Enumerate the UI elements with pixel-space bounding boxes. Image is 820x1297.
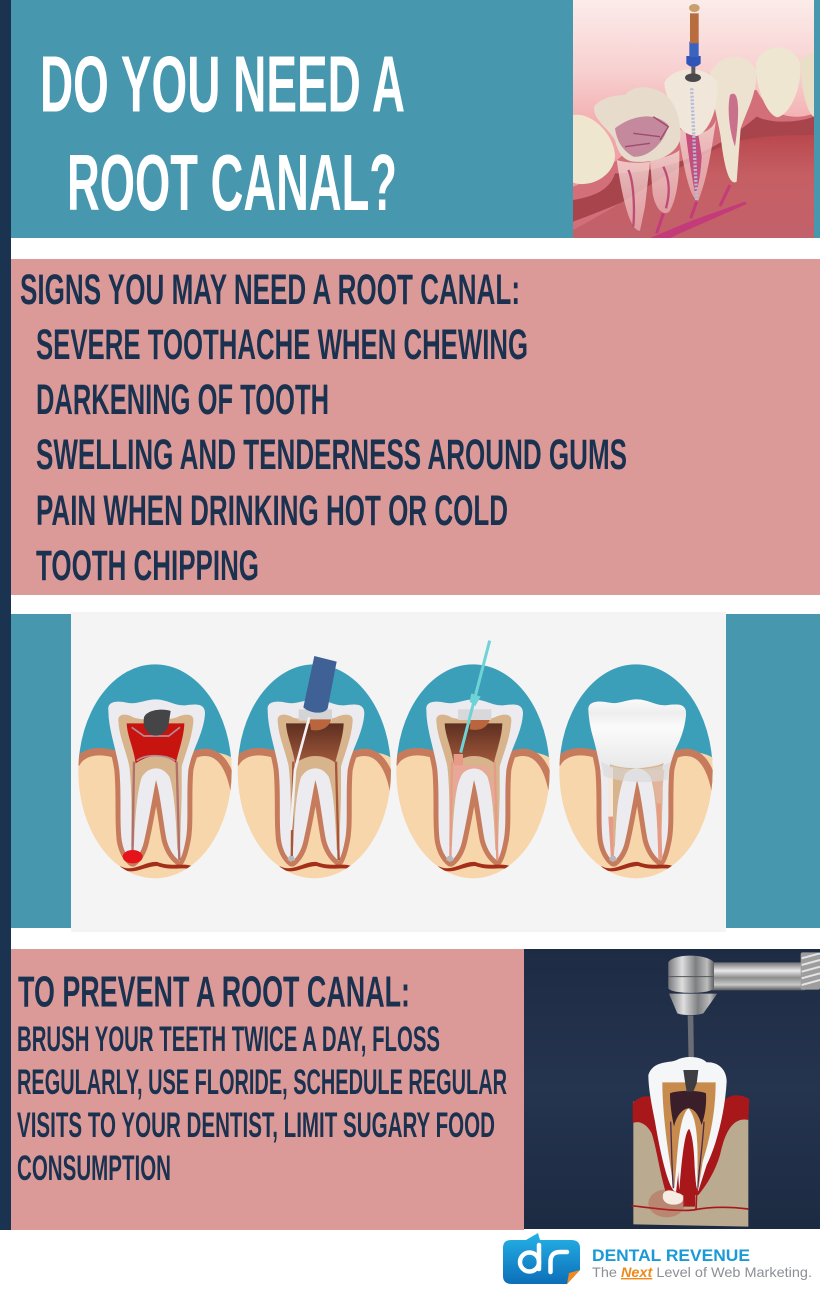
endodontic file (692, 88, 697, 200)
prevention text: BRUSH YOUR TEETH TWICE A DAY, FLOSS (17, 1020, 440, 1059)
left navy stripe (0, 0, 11, 1230)
title: ROOT CANAL? (67, 138, 397, 227)
signs list: PAIN WHEN DRINKING HOT OR COLD (36, 487, 508, 535)
pulp arch (678, 1108, 698, 1190)
signs list (36, 321, 627, 590)
tooth step 4: restored crown (551, 660, 721, 883)
bone block (633, 1100, 748, 1227)
panel: treatment steps (11, 612, 820, 932)
incisors (756, 48, 800, 117)
signs list: DARKENING OF TOOTH (36, 376, 329, 424)
molar crown (594, 87, 680, 162)
illustration: dental drill over infected tooth (524, 949, 820, 1229)
prevention heading: TO PREVENT A ROOT CANAL: (18, 968, 410, 1016)
prevention text: VISITS TO YOUR DENTIST, LIMIT SUGARY FOOD (17, 1106, 495, 1145)
prevention text (17, 1020, 507, 1188)
signs list: TOOTH CHIPPING (36, 542, 259, 590)
panel: signs (11, 259, 820, 595)
illustration: root canal file in molar (573, 0, 814, 238)
title: DO YOU NEED A (40, 40, 405, 128)
header panel (11, 0, 820, 238)
premolar front root (677, 120, 716, 201)
logo icon (503, 1233, 580, 1284)
panel: prevention (11, 949, 524, 1230)
molar roots (617, 160, 650, 231)
prevention text: CONSUMPTION (17, 1149, 171, 1188)
logo: Dental Revenue (503, 1233, 812, 1284)
enamel (648, 1057, 727, 1192)
tooth step 1: infected pulp (70, 660, 240, 883)
title (40, 40, 405, 227)
tooth step 3: filling canal (388, 641, 558, 883)
decay (670, 1091, 706, 1127)
premolar crown (664, 69, 718, 136)
nerves (650, 202, 747, 238)
left tooth (573, 115, 615, 184)
tooth step 2: file cleaning canal (229, 656, 399, 883)
logo tagline: The Next Level of Web Marketing. (592, 1264, 812, 1280)
logo wordmark: DENTAL REVENUE (592, 1246, 750, 1265)
premolar back (711, 56, 756, 182)
dentin (662, 1082, 716, 1190)
gum back (573, 90, 814, 238)
